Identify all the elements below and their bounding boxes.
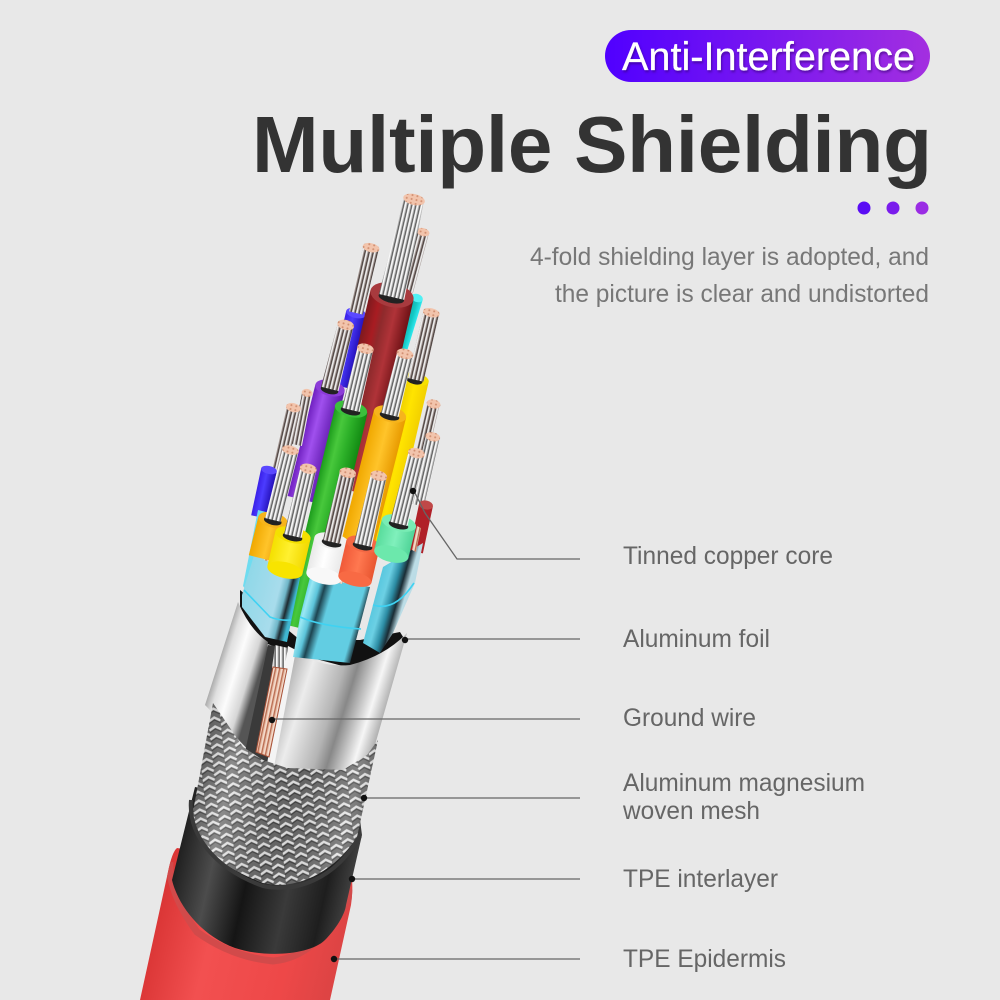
wire: white core xyxy=(305,464,366,588)
wire: yellow small core xyxy=(266,460,327,582)
label: Aluminum magnesium woven mesh xyxy=(622,769,865,825)
description text xyxy=(530,243,929,308)
description text: 4-fold shielding layer is adopted, and xyxy=(530,243,929,271)
leader: woven mesh xyxy=(361,795,580,801)
ground wire xyxy=(256,645,288,757)
label: Aluminum magnesium woven mesh: Aluminum magnesium xyxy=(623,769,865,797)
wire: amber small core xyxy=(249,442,306,562)
wire: red insulated core xyxy=(326,189,437,495)
woven mesh xyxy=(191,703,378,888)
shield bands xyxy=(244,583,414,629)
label: Ground wire: Ground wire xyxy=(623,704,756,732)
label: Aluminum foil: Aluminum foil xyxy=(623,625,770,653)
label: TPE interlayer: TPE interlayer xyxy=(623,865,778,893)
description text: the picture is clear and undistorted xyxy=(555,280,929,308)
leader: TPE epidermis xyxy=(331,956,580,962)
label: Tinned copper core: Tinned copper core xyxy=(623,542,833,570)
wire: small blue core xyxy=(251,464,278,519)
wire: right back cores xyxy=(409,398,441,482)
leader: tinned copper core xyxy=(410,488,580,559)
label: Aluminum magnesium woven mesh: woven mesh xyxy=(622,797,760,825)
wire: purple insulated core xyxy=(288,316,361,503)
aluminum foil xyxy=(205,602,407,775)
shield: left teal foil xyxy=(242,552,300,642)
wire: left grey core xyxy=(272,402,302,472)
label: TPE Epidermis: TPE Epidermis xyxy=(623,945,786,973)
badge: Anti-Interference: Anti-Interference xyxy=(622,35,915,79)
shield: middle teal foil xyxy=(293,577,370,663)
wire: cyan insulated core xyxy=(390,292,424,369)
wire: orange core xyxy=(337,467,396,590)
black TPE interlayer xyxy=(172,787,362,954)
outer red epidermis xyxy=(140,848,352,1000)
wire: right middle core xyxy=(410,431,441,507)
decorative dots xyxy=(858,202,928,214)
cable illustration xyxy=(140,189,445,1000)
shield: right teal foil xyxy=(363,543,423,653)
wire: blue insulated core xyxy=(329,241,382,388)
short copper ground strands xyxy=(264,526,421,584)
shield: back cyan sliver xyxy=(243,510,274,590)
wire: amber insulated core xyxy=(338,345,422,564)
title: Multiple Shielding xyxy=(252,100,932,189)
foil opening shadow xyxy=(240,590,405,668)
wire: small red core xyxy=(409,499,434,553)
leader: TPE interlayer xyxy=(349,876,580,882)
wire: green insulated core xyxy=(283,340,383,632)
wire: yellow insulated core xyxy=(365,305,445,548)
wire: back red core xyxy=(401,227,430,294)
wire: back left cores xyxy=(292,388,313,446)
wire: mint core xyxy=(372,444,435,566)
leader: aluminum foil xyxy=(402,637,580,643)
red epidermis lip xyxy=(170,862,353,961)
leader: ground wire xyxy=(269,717,580,723)
